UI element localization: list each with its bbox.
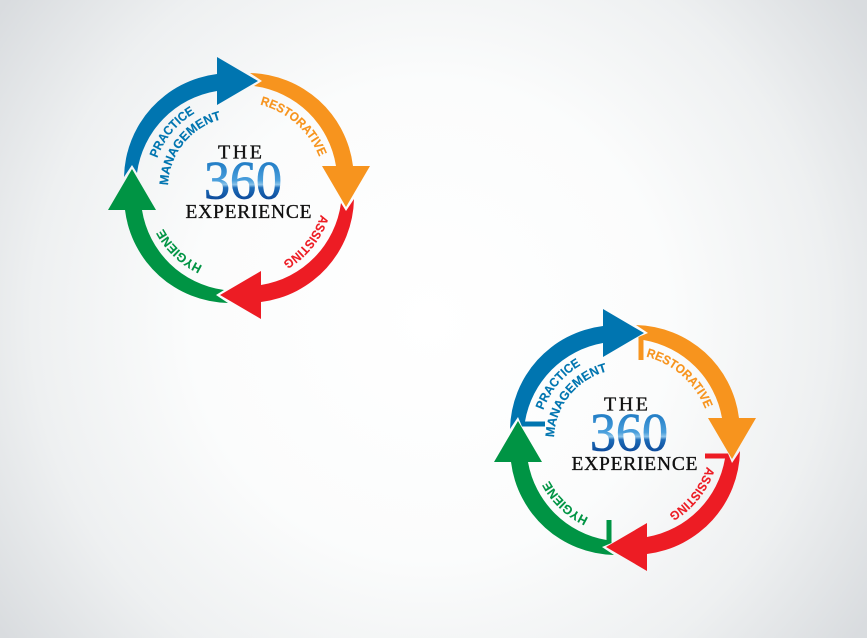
arrow: practice management (blue): [510, 309, 644, 429]
label: hygiene: HYGIENE: [156, 229, 202, 274]
label: management: MANAGEMENT: [159, 111, 219, 185]
label: restorative: RESTORATIVE: [260, 96, 327, 156]
arrow: assisting (red): [220, 199, 354, 319]
label: hygiene: HYGIENE: [542, 481, 588, 526]
diagram: bottom-right 360 cycle with bracket ticks: [494, 309, 756, 571]
arrow: assisting (red): [606, 451, 740, 571]
label: restorative: RESTORATIVE: [646, 348, 713, 408]
label: practice: PRACTICE: [149, 106, 194, 158]
label: assisting: ASSISTING: [670, 466, 714, 520]
arrow: practice management (blue): [124, 57, 258, 177]
arrow: restorative (orange): [250, 73, 370, 207]
title word: experience: EXPERIENCE: [186, 202, 312, 223]
label: assisting: ASSISTING: [284, 214, 328, 268]
diagram: top-left 360 cycle: [108, 57, 370, 319]
center title: the 360 experience: [186, 142, 312, 223]
label: practice: PRACTICE: [535, 358, 580, 410]
arrow: hygiene (green): [494, 421, 614, 555]
label: management: MANAGEMENT: [545, 363, 605, 437]
title word: experience: EXPERIENCE: [572, 454, 698, 475]
title word: the: THE: [604, 394, 648, 416]
arrow: hygiene (green): [108, 169, 228, 303]
center title: the 360 experience: [572, 394, 698, 475]
title word: the: THE: [218, 142, 262, 164]
arrow: restorative (orange): [636, 325, 756, 459]
title number: 360: 360: [590, 402, 668, 462]
title number: 360: 360: [204, 150, 282, 210]
